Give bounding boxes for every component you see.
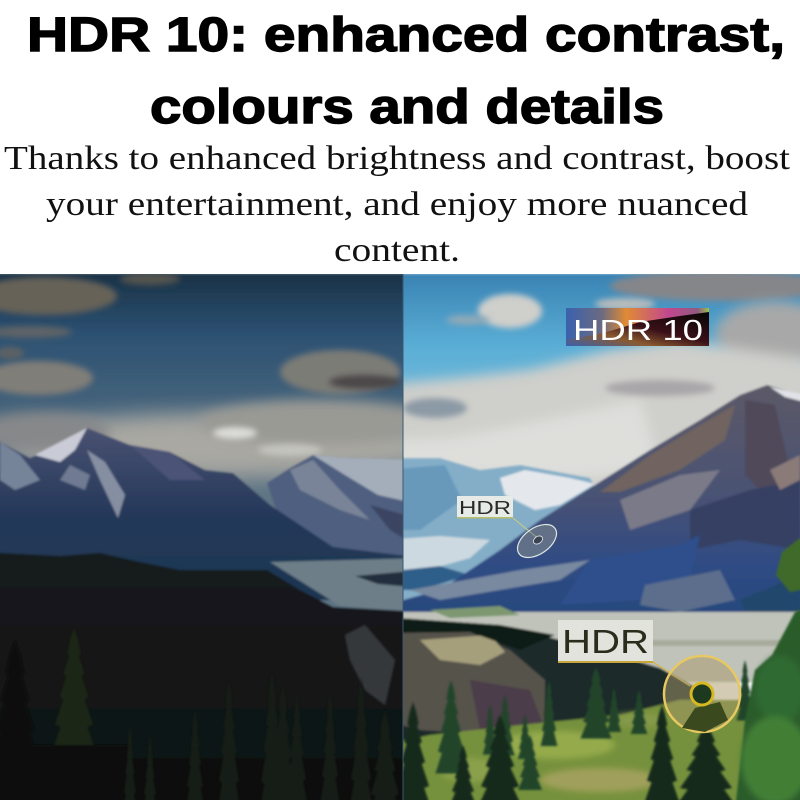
description text — [4, 140, 791, 269]
badge: HDR 10 logo — [566, 308, 709, 347]
large mountain — [383, 385, 800, 625]
callout: HDR detail — [558, 620, 740, 732]
description text: your entertainment, and enjoy more nuanced — [46, 186, 748, 223]
photo: standard dynamic range half — [0, 274, 403, 800]
callout: HDR detail: HDR — [562, 623, 649, 660]
green meadow — [403, 698, 746, 800]
river valley — [270, 557, 403, 611]
green trees — [394, 538, 800, 800]
forested hillside — [403, 621, 694, 742]
vertical split line — [402, 274, 404, 800]
dark trees — [0, 628, 402, 800]
title: HDR 10: enhanced contrast, — [27, 9, 785, 62]
far blue mountains — [403, 456, 594, 600]
far right mountain — [267, 454, 403, 556]
description text: Thanks to enhanced brightness and contrast, boost — [4, 140, 791, 177]
main mountains — [0, 428, 423, 600]
title: colours and details — [150, 81, 664, 134]
dark forest — [0, 552, 423, 800]
title — [27, 9, 785, 134]
badge: HDR 10 logo: HDR 10 — [573, 315, 703, 347]
callout: HDR disc: HDR — [459, 498, 511, 518]
valley plain — [383, 612, 800, 682]
photo: HDR half — [383, 260, 800, 800]
description text: content. — [334, 232, 460, 269]
callout: HDR disc — [457, 496, 562, 564]
